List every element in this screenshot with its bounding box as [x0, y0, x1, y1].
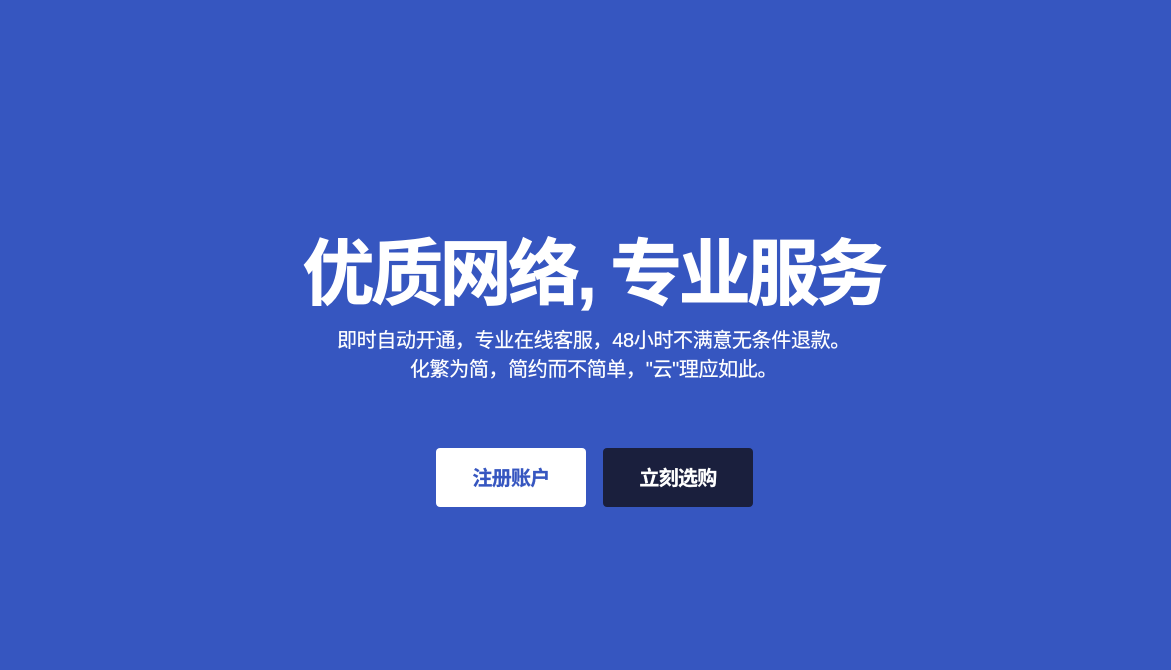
subtitle text: 化繁为简，简约而不简单，"云"理应如此。	[410, 359, 777, 381]
button: register: 注册账户	[472, 468, 550, 490]
button: register	[436, 448, 586, 507]
title: 优质网络, 专业服务	[302, 235, 884, 315]
subtitle text: 即时自动开通，专业在线客服，48小时不满意无条件退款。	[337, 330, 850, 352]
subtitle text	[337, 330, 850, 381]
button: buy now: 立刻选购	[639, 468, 717, 490]
button: buy now	[603, 448, 753, 507]
